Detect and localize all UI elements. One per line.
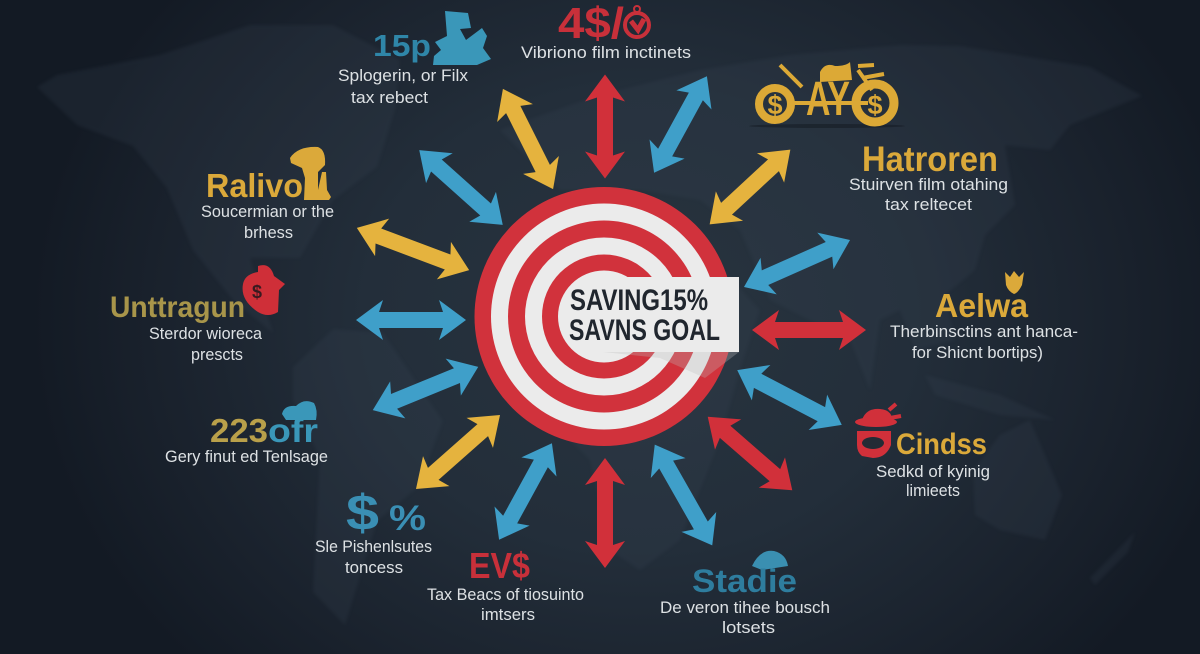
icon: blue figure (433, 11, 491, 65)
description line 2: tax rebect (351, 88, 428, 107)
icon: red hat (855, 404, 901, 458)
heading: Stadie (692, 563, 797, 599)
heading: Hatroren (862, 140, 998, 179)
description: Sedkd of kyinig (876, 462, 990, 481)
icon: blue dollar: $ (346, 485, 379, 541)
icon: blue swirl (752, 551, 788, 570)
map: New Zealand (1090, 532, 1135, 585)
description: Gery finut ed Tenlsage (165, 447, 328, 466)
callout: Ralivo (201, 147, 334, 242)
banner text line 2: SAVNS GOAL (569, 314, 720, 347)
description: Tax Beacs of tiosuinto (427, 585, 584, 604)
icon: gold dollar bicycle: AY (806, 73, 850, 126)
description line 2: prescts (191, 345, 243, 364)
heading: 15p (373, 28, 431, 63)
description: Sle Pishenlsutes (315, 537, 432, 556)
callout: Stadie (660, 551, 830, 637)
description: Therbinsctins ant hanca- (890, 322, 1078, 341)
arrow: right lower blue (728, 352, 851, 443)
central target with goal banner (474, 187, 739, 446)
icon: red clock (625, 6, 649, 37)
description line 2: limieets (906, 481, 960, 500)
arrows ring (350, 67, 866, 568)
arrow: left upper yellow (350, 209, 476, 289)
arrow: top red (585, 74, 625, 178)
arrow: lower left yellow (403, 400, 513, 504)
banner shadow (603, 352, 739, 378)
map: Indonesia (925, 375, 1055, 420)
arrow: bottom red (585, 458, 625, 568)
map: Africa (500, 225, 760, 570)
arrow: top left yellow (485, 80, 571, 198)
map: South America (293, 329, 443, 625)
arrow: left lower blue (365, 348, 486, 429)
description: Vibriono film inctinets (521, 43, 691, 62)
heading: 4$/ (558, 0, 624, 48)
callout: 4$/ (521, 0, 691, 62)
banner text line 1: SAVING15% (570, 284, 708, 317)
icon: gold statue (290, 147, 331, 200)
arrow: top right blue (637, 67, 724, 182)
description line 2: for Shicnt bortips) (912, 343, 1043, 362)
map: Europe and Asia (500, 45, 1142, 390)
callout: 15p (338, 11, 491, 107)
heading: Ralivo (206, 167, 303, 204)
arrow: bottom right blue (637, 435, 730, 555)
description line 2: lotsets (722, 618, 775, 637)
icon: gold dollar bicycle: $ (867, 90, 883, 120)
callout: 223ofr (165, 401, 328, 466)
heading: Cindss (896, 428, 987, 461)
icon: gold dollar bicycle (749, 62, 905, 128)
description: De veron tihee bousch (660, 598, 830, 617)
icon: gold dollar bicycle: $ (767, 90, 783, 120)
icon: blue cloud (282, 401, 317, 420)
callout: EV$ (427, 545, 584, 624)
callout: Unttragun (110, 265, 285, 364)
arrow: upper right yellow (696, 135, 804, 239)
arrow: right red (752, 310, 866, 350)
description: Splogerin, or Filx (338, 66, 468, 85)
description: Sterdor wioreca (149, 324, 263, 343)
description: Stuirven film otahing (849, 175, 1008, 194)
target rings (474, 187, 734, 446)
arrow: right upper blue (736, 222, 858, 305)
icon: red money bag: $ (252, 282, 262, 302)
heading: Unttragun (110, 291, 245, 324)
heading suffix: ofr (268, 412, 318, 449)
icon: gold crown (1005, 271, 1024, 294)
description line 2: imtsers (481, 605, 535, 624)
callout: $ % (315, 485, 432, 577)
callout: Cindss (855, 404, 990, 500)
callout: Aelwa (890, 271, 1078, 362)
arrow: left blue (356, 300, 466, 340)
arrow: upper left blue (406, 135, 516, 240)
description line 2: toncess (345, 558, 403, 577)
map: North America (37, 25, 400, 333)
percent sign: % (389, 499, 426, 538)
icon: red money bag (243, 265, 285, 315)
map: Australia (973, 420, 1062, 540)
heading number: 223 (210, 412, 268, 449)
heading: EV$ (469, 545, 530, 586)
heading: Aelwa (935, 287, 1029, 324)
description: Soucermian or the (201, 202, 334, 221)
description line 2: tax reltecet (885, 195, 972, 214)
description line 2: brhess (244, 223, 293, 242)
callout: Hatroren (849, 140, 1008, 214)
arrow: bottom left blue (482, 434, 569, 549)
goal banner (610, 277, 739, 352)
arrow: lower right red (695, 402, 805, 505)
